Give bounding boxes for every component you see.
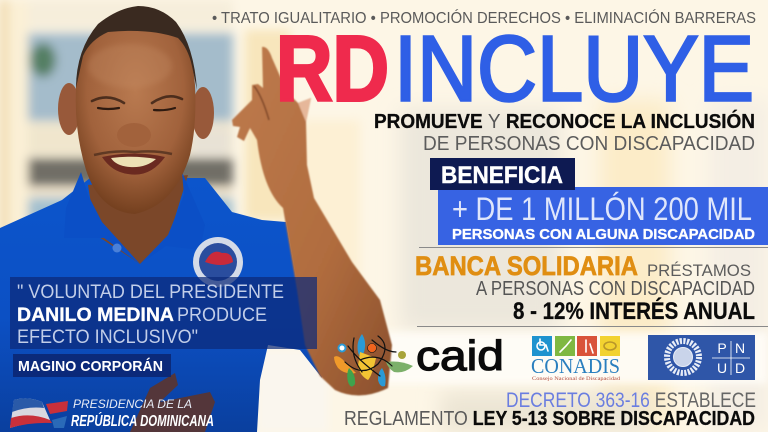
hair (76, 6, 197, 90)
caid wordmark: caid (416, 332, 504, 379)
title RD: RD (276, 16, 389, 120)
pnud letters: N (735, 340, 745, 356)
conadis wordmark: CONADIS (531, 354, 620, 378)
subtitle line 1: PROMUEVE Y RECONOCE LA INCLUSIÓN (374, 109, 755, 133)
raised hand and arm (232, 47, 392, 396)
panel: banca solidaria (415, 251, 755, 325)
quote line 2 continued: PRODUCE (177, 305, 267, 326)
nose (117, 123, 151, 147)
decree text (344, 388, 756, 430)
shirt button (112, 244, 122, 252)
quote background (10, 277, 317, 349)
author name: MAGINO CORPORÁN (18, 358, 163, 375)
subtitle line 2: DE PERSONAS CON DISCAPACIDAD (423, 133, 755, 155)
pnud letters: U (717, 360, 727, 376)
shirt badge (193, 237, 243, 287)
title: RD INCLUYE (276, 16, 754, 120)
panel: quote (10, 277, 317, 349)
quote line 2: DANILO MEDINA (17, 305, 174, 326)
logo: pnud (648, 335, 755, 380)
panel: beneficiaries (430, 158, 768, 245)
forehead highlight (88, 44, 172, 88)
logo: presidencia (10, 398, 214, 430)
smile (94, 151, 172, 175)
head (76, 15, 195, 214)
conadis icon tiles (532, 336, 620, 356)
un emblem (667, 341, 699, 373)
blue beneficiaries box (438, 187, 768, 245)
white logo strip (330, 332, 768, 384)
pnud letters (717, 340, 745, 376)
beneficia label: BENEFICIA (441, 162, 563, 189)
eyes and brows (92, 96, 182, 110)
pnud letters: D (735, 360, 745, 376)
conadis caption: Consejo Nacional de Discapacidad (532, 377, 621, 382)
neck (88, 175, 188, 264)
lower hand on chest (130, 373, 215, 432)
dominican flag (10, 398, 68, 428)
quote line 3: EFECTO INCLUSIVO" (17, 327, 198, 348)
pnud letters: P (717, 340, 727, 356)
logo: conadis (531, 336, 621, 382)
pnud dividers (712, 341, 750, 375)
logo: caid (334, 332, 504, 387)
subtitle (374, 109, 755, 155)
banca solidaria heading: BANCA SOLIDARIA (415, 251, 638, 281)
presidencia de la: PRESIDENCIA DE LA (73, 399, 192, 411)
prestamos: PRÉSTAMOS (647, 261, 751, 280)
caid mark (334, 334, 413, 387)
photo: smiling young man in blue polo (0, 6, 392, 432)
collar (64, 172, 205, 264)
quote line 1: " VOLUNTAD DEL PRESIDENTE (17, 282, 284, 303)
republica dominicana: REPÚBLICA DOMINICANA (71, 411, 214, 430)
ears (58, 83, 214, 139)
tile pictograms (537, 339, 616, 353)
number caption: PERSONAS CON ALGUNA DISCAPACIDAD (452, 226, 755, 243)
shirt (0, 178, 322, 432)
author tag (13, 354, 171, 377)
beneficia tag (430, 158, 575, 190)
